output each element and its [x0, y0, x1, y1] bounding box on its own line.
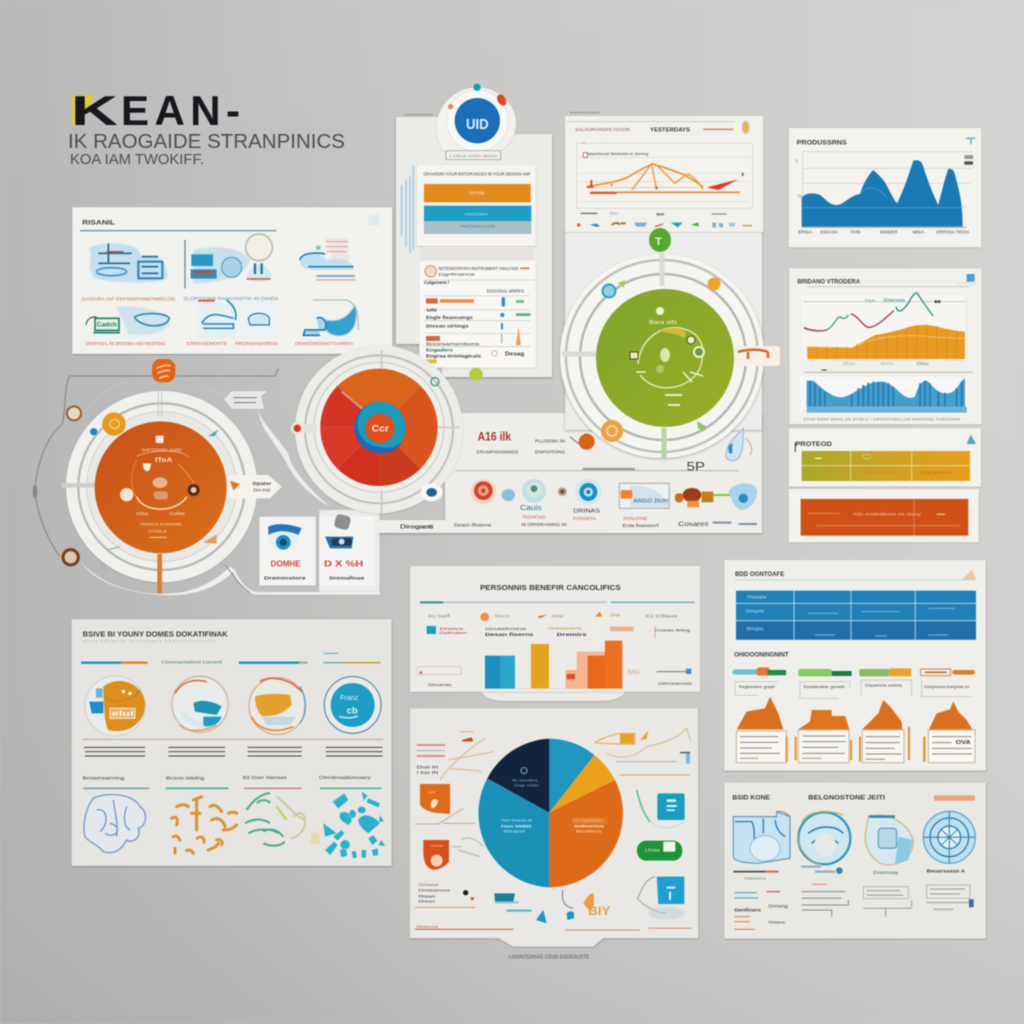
- icon group 6: [303, 300, 358, 336]
- process strip content: FONSEPL: [573, 516, 597, 521]
- panel: right area chart: [789, 128, 981, 247]
- centre target: [354, 402, 406, 453]
- bars: [485, 617, 622, 689]
- schematic 3: [865, 815, 913, 865]
- pin: orange badge: [152, 359, 175, 382]
- process strip content: ROAFNS: [523, 515, 545, 520]
- disc details: [120, 436, 200, 537]
- pie chart: SORGATION: [574, 824, 604, 828]
- side annotations: DIRPORAFIONS: [658, 681, 692, 686]
- pie chart: Fiore HSMIS: [501, 824, 532, 828]
- schematic 4: [923, 811, 975, 863]
- card: data table: NOTENOGRAPH INSTRUMENT ANALYSIS: [438, 266, 518, 271]
- captions: [733, 867, 965, 880]
- card: eye: DOMHE: [271, 560, 301, 569]
- note blocks: Denfiners: [734, 908, 762, 913]
- description rows: [84, 747, 383, 756]
- panel: line chart card: YESTERDAYS: [650, 128, 690, 134]
- sub-heading: OHIOOONINGNINT: [734, 653, 789, 659]
- schematic 2: [798, 812, 850, 865]
- process strip content: DRINAS: [573, 509, 601, 515]
- bar: [801, 499, 968, 536]
- blue badge dial: [405, 84, 600, 160]
- icon: red left tag: [423, 840, 449, 870]
- card: data table: Dgrfinance: [438, 272, 476, 277]
- left lower notes: [415, 882, 513, 929]
- card: data table: [419, 261, 536, 368]
- card: data table: UN: [427, 308, 437, 314]
- caption row: DASIARA ISF GEFNISPONETIIRELON: [82, 297, 175, 302]
- legend labels: Cronso fining: [655, 628, 690, 633]
- connector machine: [675, 484, 757, 510]
- legend labels: [427, 612, 690, 638]
- ornament spiral 1: [471, 479, 496, 504]
- heading: PRODUSSRNS: [797, 139, 847, 146]
- disc details: Bara sifs: [649, 320, 677, 326]
- ornament spiral 2: [522, 479, 546, 503]
- process strip content: Deacn iftrainne: [454, 523, 492, 528]
- blue table: Bnugas: [747, 626, 763, 631]
- process strip content: Diroganti: [400, 524, 433, 530]
- panel: right area chart: THS: [851, 229, 861, 234]
- bottom icons: [494, 890, 610, 923]
- legend labels: Dnelcs: [439, 627, 464, 631]
- icon: lime pin: [469, 368, 483, 380]
- panel: combined line and bar chart: Dron: [843, 361, 856, 366]
- process strip content: M ORISRANING IN: [522, 522, 567, 527]
- panel: orange table: Ailo enstrations es Isxxy: [853, 512, 922, 517]
- orange badge: [579, 434, 595, 450]
- pin: blue eye: [421, 483, 443, 501]
- subtitle: IK RAOGAIDE STRANPINICS: [68, 131, 345, 153]
- column rules: Cimonantationt Lunand: [161, 660, 222, 665]
- panel caption: LISONTERNAE CSUS ENDESUSTE: [509, 954, 589, 960]
- red pie: [320, 369, 438, 486]
- pie chart: Hsd Strauss Ar: [502, 819, 533, 823]
- process strip content: [400, 428, 757, 530]
- left lower notes: Grhoua: [418, 882, 439, 887]
- icon group 4: [86, 306, 170, 335]
- pie chart: Ai snntirs: [512, 778, 538, 783]
- left notes: I tuo IN: [417, 770, 438, 775]
- pie chart: Bnofifors: [576, 830, 602, 834]
- pin: amber: [102, 412, 126, 436]
- card: data table: Desag: [505, 351, 525, 357]
- orange disc: [95, 421, 227, 553]
- legend labels: Gnastrmne: [485, 627, 527, 631]
- process strip content: ROSAPNE: [623, 516, 647, 521]
- card: lens: [319, 517, 374, 586]
- card: orange and teal bars: OPANE: [469, 191, 485, 196]
- persona 4: Franz: [340, 693, 359, 702]
- left notes: Dus In: [417, 764, 439, 769]
- title: EAN-: [121, 87, 240, 134]
- panel: blue wheels right: [724, 783, 986, 939]
- left lower notes: Dhesn: [418, 898, 435, 903]
- card: orange and teal bars: [402, 165, 536, 253]
- blue badge dial: Lrdua enlA ttone: [449, 153, 498, 159]
- card: lens: D X %H: [324, 560, 364, 569]
- pie chart: Strand: [503, 830, 525, 834]
- title accent: yellow K block: [72, 95, 94, 125]
- icon group 3: [299, 238, 355, 280]
- panel: right area chart: ERROSA TIGOA: [937, 229, 969, 234]
- title letter K: K: [71, 87, 118, 134]
- red dial: Ccr: [372, 424, 389, 434]
- icon: green pill: Lhsas: [645, 848, 660, 853]
- pin: red: [291, 422, 304, 435]
- panel: combined line and bar chart: Dlas: [917, 361, 929, 366]
- icon group 5: [198, 300, 275, 338]
- pie chart: Gsp Inter: [514, 783, 540, 788]
- centre column cards: [402, 165, 536, 380]
- headings: BSID KONE: [732, 794, 771, 801]
- orange house cards: OVA: [956, 740, 971, 746]
- icon: teal right tag 1: [650, 793, 687, 828]
- panel: line chart card: Dsmon Inna: [582, 142, 619, 147]
- doodle: cyan: [323, 792, 385, 858]
- legend labels: Gnesumens: [548, 626, 582, 630]
- left orange dial: [33, 359, 380, 595]
- connector band: [258, 410, 330, 507]
- panel: icon grid top left: SLOPTIONS RANCHISTIK IN DINES: [183, 296, 278, 301]
- panel: bar chart: [410, 566, 700, 701]
- outer white band: [80, 560, 235, 595]
- legend labels: Snia: [552, 613, 564, 618]
- card: eye: Dreminstore: [264, 575, 307, 580]
- captions: Dramsay: [873, 870, 899, 876]
- pin: orange swirl: [601, 420, 623, 442]
- panel: right area chart: MSA: [913, 229, 924, 234]
- pie chart: [478, 739, 623, 887]
- heading: BSIVE BI YOUNY DOMES DOKATIFINAK: [83, 630, 228, 639]
- left notes: [417, 732, 493, 780]
- connector lines: [35, 368, 278, 557]
- panel: combined line and bar chart: STOR BANK BRAS ON STIRLS • DRINGFONDLOW MASDONS SUBSTRAN: [803, 416, 960, 421]
- pin: teal swirl: [602, 284, 616, 298]
- left lower notes: Risan: [418, 893, 435, 898]
- blue doodle: [726, 428, 743, 461]
- card: data table: Dissan uirtings: [426, 323, 469, 328]
- legend labels: Blavs: [495, 613, 510, 618]
- panel: combined line and bar chart: Dors: [881, 361, 893, 366]
- card: data table: Calgement /: [424, 280, 450, 285]
- legend labels: Ci Cllaus: [646, 614, 679, 619]
- panel: combined line and bar chart: [789, 268, 982, 424]
- process box: ANGO 2IUH: [633, 499, 668, 505]
- panel: olive amber table: [789, 428, 981, 487]
- icon: leaf: [697, 421, 707, 431]
- caption boxes: Sustainable growth: [803, 685, 845, 689]
- card: eye: [259, 517, 316, 586]
- line chart: [577, 143, 753, 208]
- panel: right area chart: S: [795, 159, 798, 164]
- side annotations: Dirsanas: [428, 682, 452, 687]
- bottom icons: BIY: [588, 904, 610, 918]
- card: lens: Dremafinae: [329, 575, 365, 580]
- strip captions: Cauis: [520, 503, 542, 512]
- disc details: SHFTERING SYRE: [142, 448, 182, 453]
- persona 4: [324, 677, 381, 733]
- panel: olive amber table: Stration: [920, 470, 953, 475]
- process strip content: Cosanni: [678, 521, 709, 528]
- tab: right label: [228, 475, 282, 498]
- panel: icon grid top left: ERIPAGENENTS: [187, 341, 227, 346]
- persona 4: cb: [347, 705, 358, 715]
- legend labels: Sria: [610, 613, 621, 618]
- process strip content: Erda fisansesT: [623, 523, 660, 528]
- icon: teal right tag 2: [637, 877, 685, 920]
- chart legend: [577, 211, 752, 227]
- card: orange and teal bars: PRACTHONS IN GOR: [460, 223, 495, 228]
- line chart: Rasemtonal fieldsatrs in anning: [585, 152, 648, 156]
- icon: red left tag: Sufanage: [431, 844, 444, 848]
- icon group 4: Cadch: [97, 322, 117, 329]
- sub-headings: Chnrdenaddumvaery: [319, 775, 371, 781]
- tab: right label: Drs Inst: [253, 488, 271, 493]
- area chart: [802, 160, 963, 227]
- persona 2: [172, 676, 228, 732]
- red dial: Diroganti: [400, 524, 433, 530]
- ornament spiral 3: [575, 478, 602, 505]
- orange stem: [157, 554, 162, 593]
- sub-headings: BS Doer nlamsas: [243, 775, 287, 781]
- disc details: [630, 307, 704, 405]
- card: orange and teal bars: ENGESANS: [465, 211, 488, 216]
- doodle: blue: [84, 795, 145, 853]
- blue table: Dnsgms: [746, 608, 764, 613]
- doodle: teal green: [245, 793, 305, 846]
- panel: olive amber table: Renagrs: [863, 470, 897, 475]
- tab: upper label: [223, 391, 268, 409]
- persona 1: [85, 676, 145, 736]
- chart legend: Bran: [610, 211, 618, 216]
- panel: combined line and bar chart: Fiun: [865, 298, 876, 303]
- pin: blue: [90, 428, 97, 435]
- heading: BDD OGNTOAFE: [735, 572, 784, 578]
- panel: centre back sheet: [396, 117, 552, 377]
- card: orange and teal bars: GRAVEDIN YOUR ENTORANCES IN YOUR DESIGN ANP: [423, 172, 531, 177]
- icon: green pill: [637, 841, 682, 861]
- caption boxes: Dsparnos estina: [865, 684, 903, 688]
- strip heading: A16 ilk: [478, 430, 511, 444]
- doodle: orange: [172, 797, 237, 853]
- pin: brown dots: [67, 406, 81, 420]
- chart heading: DALSURIANOFE ACOOK: [575, 127, 631, 133]
- sub-headings: [83, 775, 382, 788]
- blue bars: [800, 377, 968, 413]
- sub-headings: Bcsos istidrig: [166, 775, 205, 781]
- note blocks: [734, 884, 974, 929]
- process strip content: 5P: [687, 460, 705, 474]
- blue table: Thissaior: [747, 594, 767, 599]
- panel: combined line and bar chart: ■■: [934, 299, 941, 305]
- tab: right label: [735, 346, 780, 366]
- heading: PROTEOD: [795, 441, 832, 448]
- sub-headings: Brownsanring: [83, 776, 125, 782]
- panel heading: RISANIL: [82, 219, 115, 226]
- caption boxes: Dshgmosus Dshgmas no: [924, 685, 969, 689]
- legend labels: Dsifmaion: [439, 631, 467, 635]
- icon group 2: [185, 234, 272, 288]
- pie chart: Groupidation: [574, 819, 605, 823]
- legend labels: Desan fiserns: [485, 632, 534, 637]
- caption boxes: [735, 680, 972, 698]
- disc details: Goilsa: [169, 511, 185, 516]
- process strip content: ENPOITONS: [535, 449, 565, 454]
- pin: green top badge: [649, 228, 671, 252]
- sub-subtitle: KOA IAM TWOKIFF.: [70, 151, 204, 168]
- card: data table: DISSONAL MNRES: [487, 288, 524, 293]
- panel: table and cards right: [724, 560, 986, 771]
- panel: line chart card: [565, 116, 763, 232]
- panel: right area chart: INSIDER: [880, 229, 897, 234]
- card: data table: Boorsamentions: [426, 342, 479, 347]
- green dial: [560, 228, 780, 458]
- card: data table: Engrsa tiniolagicals: [426, 354, 481, 359]
- disc details: FERANCE IN ENORMS: [140, 521, 182, 526]
- card: data table: Engaders: [426, 348, 453, 353]
- pins: [473, 84, 481, 91]
- caption row 2: DROPOSAL RE BROOMIA AND INESPONE: [86, 341, 165, 346]
- panel: bottom process strip: [377, 413, 762, 533]
- blue table: [736, 591, 976, 640]
- pill row: [732, 667, 975, 676]
- icon: orange left tag: [420, 784, 450, 814]
- note blocks: Sistans: [768, 919, 785, 924]
- panel: personas grid bottom left: STOR PRENTSE IN STRANTS PRESIRATHTEROS: [83, 639, 215, 644]
- process strip content: ERANPISIONNOS: [477, 450, 518, 455]
- chart legend: Boll: [657, 211, 664, 216]
- badge label: UID: [466, 117, 489, 133]
- captions: Beuarsasas A: [927, 869, 965, 875]
- orange house cards: [736, 697, 975, 763]
- pin: amber dot: [708, 278, 720, 290]
- disc details: IToA: [155, 458, 173, 464]
- green disc: [596, 289, 734, 427]
- red dial: [291, 345, 463, 530]
- icon: orange left tag: IUN: [428, 789, 435, 794]
- panel: right area chart: ESOCSA: [821, 229, 837, 234]
- panel: right area chart: ERSA: [798, 229, 812, 234]
- note blocks: Grnsng: [768, 903, 788, 908]
- process box: [619, 483, 669, 508]
- panel: icon grid top left: PRONSANAREIS: [235, 341, 278, 346]
- panel: sheet behind green dial: [565, 230, 762, 430]
- panel: pie chart: [410, 708, 698, 960]
- top right doodles: [595, 728, 691, 822]
- disc details: CONLA: [148, 529, 167, 534]
- panel: personas grid bottom left: [72, 619, 392, 866]
- heading: BRIDANO VTRODERA: [797, 279, 860, 286]
- left lower notes: Dinfoure: [417, 924, 439, 929]
- pin: green top badge: T: [655, 236, 662, 248]
- icon group 1: [89, 243, 167, 283]
- blue circle: [455, 98, 500, 143]
- tab: right label: Dpatsr: [253, 481, 272, 486]
- disc details: Giba: [136, 511, 148, 516]
- panel: orange table: [789, 489, 979, 542]
- persona 3: [249, 678, 306, 734]
- line series: [804, 293, 933, 331]
- left lower notes: Dmisanore: [418, 887, 451, 892]
- panel: blue wheels right: BELGNOSTONE JEITI: [808, 795, 885, 802]
- persona 1: eluI: [112, 709, 134, 718]
- chart heading: PERSONNIS BENEFIR CANCOLIFICS: [480, 583, 621, 592]
- panel: combined line and bar chart: Stracosa: [883, 298, 905, 304]
- card: data table: Engle fisancuings: [426, 315, 473, 320]
- process strip content: PLUSEMA IN: [535, 439, 565, 444]
- schematic 1: [733, 811, 790, 863]
- side annotations: SAU: [627, 670, 639, 676]
- title block: [68, 87, 345, 168]
- panel: right area chart: Ta: [797, 193, 802, 198]
- legend labels: iku Sarfl: [428, 613, 450, 618]
- legend labels: Dremirs: [557, 632, 587, 637]
- captions: Dlanisms: [744, 875, 766, 880]
- caption boxes: Registration graph: [739, 685, 775, 689]
- orange bars: [807, 325, 965, 359]
- panel: icon grid top left: DRINFEINESINOTSAMERA: [295, 341, 354, 346]
- panel: icon grid top left: [72, 207, 392, 354]
- tab under panel: [480, 691, 627, 701]
- mini cards: [259, 510, 379, 592]
- side annotations: [417, 667, 692, 687]
- bar: [802, 451, 970, 481]
